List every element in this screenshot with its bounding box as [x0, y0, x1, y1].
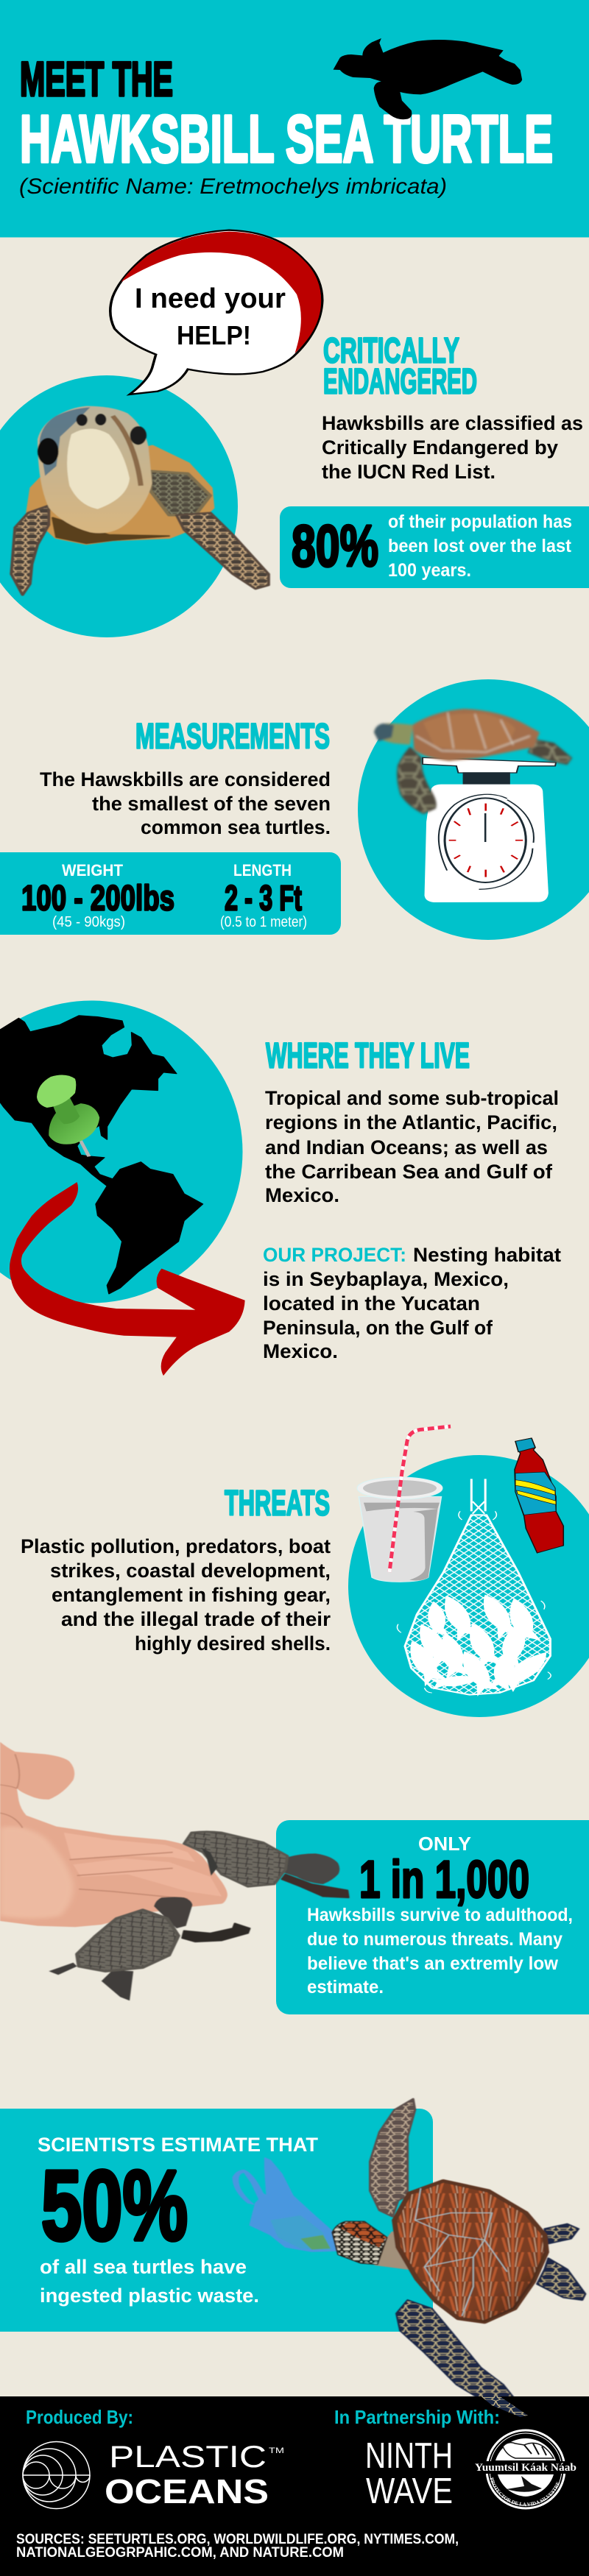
map: south america — [96, 1162, 203, 1294]
speech bubble — [110, 230, 322, 394]
photo: human hand — [0, 1742, 228, 1927]
heading: measurements: MEASUREMENTS — [135, 717, 330, 757]
logo: plastic oceans: PLASTIC — [109, 2439, 267, 2474]
callout: 1 in 1,000: 1 in 1,000 — [359, 1851, 529, 1909]
stat: 50 percent: 50% — [41, 2150, 188, 2261]
panel: threats — [21, 1426, 589, 1717]
icon: fishing net with fish — [397, 1479, 557, 1696]
icon: plastic bag — [233, 2158, 338, 2251]
photo: green turtle — [333, 2099, 585, 2417]
text: classification: Hawksbills are classified as — [322, 412, 583, 434]
turtle backdrop circle — [0, 375, 238, 637]
text: threats list: entanglement in fishing gear, — [52, 1584, 331, 1606]
scale backdrop circle — [358, 679, 589, 940]
text: ingested plastic: of all sea turtles have — [40, 2256, 247, 2278]
text: classification — [322, 412, 583, 483]
callout: 80 percent: been lost over the last — [388, 536, 572, 556]
text: threats list — [21, 1535, 331, 1655]
scientific name: (Scientific Name: Eretmochelys imbricata) — [19, 174, 447, 199]
bubble text — [135, 283, 286, 350]
text: smallest sea turtle — [40, 768, 331, 838]
text: sources — [16, 2532, 459, 2561]
text: habitat: regions in the Atlantic, Pacific, — [265, 1111, 557, 1133]
title: meet the: MEET THE — [20, 52, 173, 106]
photo: hatchling on fingers — [184, 1832, 348, 1897]
logo: plastic oceans: TM — [269, 2446, 284, 2455]
callout: 1 in 1,000: ONLY — [418, 1833, 471, 1855]
flipper tip over footer — [481, 2396, 528, 2417]
text: habitat: the Carribean Sea and Gulf of — [265, 1161, 553, 1183]
header banner — [0, 0, 589, 237]
heading: critically endangered: CRITICALLY — [323, 331, 459, 371]
text: scientists estimate: SCIENTISTS ESTIMATE THAT — [38, 2134, 318, 2156]
text: smallest sea turtle: The Hawskbills are considered — [40, 768, 331, 790]
heading: in partnership with: In Partnership With: — [334, 2406, 500, 2428]
callout: 1 in 1,000 — [276, 1820, 589, 2014]
map: north america — [0, 1016, 177, 1186]
callout: 1 in 1,000: believe that's an extremly low — [307, 1953, 559, 1974]
panel: critically endangered — [0, 230, 589, 637]
text: classification: Critically Endangered by — [322, 436, 558, 459]
text: our project: OUR PROJECT: — [263, 1244, 406, 1266]
panel: measurements — [0, 679, 589, 940]
text: our project: Nesting habitat — [413, 1244, 561, 1266]
text: habitat: Mexico. — [265, 1184, 339, 1206]
icon: plastic cup and straw — [357, 1426, 451, 1582]
text: sources: SOURCES: SEETURTLES.ORG, WORLDWILDLIFE.ORG, NYTIMES.COM, — [16, 2532, 459, 2547]
callout: 80 percent — [280, 506, 589, 588]
text: threats list: strikes, coastal development, — [50, 1560, 331, 1582]
panel: where they live — [0, 1001, 561, 1376]
footer — [0, 2396, 589, 2576]
text: ingested plastic — [40, 2256, 259, 2307]
text: our project — [263, 1244, 561, 1362]
bubble text: I need your — [135, 283, 286, 314]
logo: yuumtsil kaak naab: Yuumtsil Káak Náab — [475, 2462, 576, 2474]
callout: 80 percent: 100 years. — [388, 560, 471, 581]
photo: turtle on scale — [374, 709, 571, 813]
stats: weight and length: (0.5 to 1 meter) — [220, 914, 307, 930]
heading: critically endangered: ENDANGERED — [323, 362, 477, 402]
icon: kitchen scale — [423, 757, 556, 902]
text: smallest sea turtle: common sea turtles. — [141, 816, 331, 838]
photo: hawksbill front view — [11, 406, 269, 595]
logo: yuumtsil kaak naab: PROTECTOR DE LA VIDA SILVESTRE — [490, 2477, 560, 2507]
text: threats list: Plastic pollution, predators, boat — [21, 1535, 331, 1557]
logo: ninth wave — [365, 2436, 453, 2511]
text: classification: the IUCN Red List. — [322, 461, 495, 483]
text: our project: located in the Yucatan — [263, 1292, 480, 1314]
stats: weight and length: 100 - 200lbs — [21, 879, 174, 919]
icon: green pin — [37, 1075, 99, 1157]
icon: turtle silhouette — [334, 38, 522, 119]
stats: weight and length: 2 - 3 Ft — [225, 879, 302, 919]
text: ingested plastic: ingested plastic waste. — [40, 2285, 259, 2307]
text: our project: Mexico. — [263, 1340, 338, 1362]
text: habitat: and Indian Oceans; as well as — [265, 1136, 548, 1158]
stats: weight and length — [0, 852, 341, 935]
text: sources: NATIONALGEOGRPAHIC.COM, AND NATURE.COM — [16, 2545, 344, 2561]
text: threats list: and the illegal trade of their — [61, 1608, 331, 1630]
callout: 80 percent: of their population has — [388, 512, 572, 532]
text: threats list: highly desired shells. — [135, 1632, 331, 1655]
icon: soda bottle — [515, 1438, 563, 1553]
text: habitat: Tropical and some sub-tropical — [265, 1087, 559, 1109]
panel: plastic ingestion — [0, 2099, 585, 2417]
panel: hatchlings — [0, 1742, 589, 2014]
logo: plastic oceans — [23, 2439, 284, 2510]
heading: where they live: WHERE THEY LIVE — [266, 1036, 470, 1076]
arrow: red — [10, 1182, 245, 1376]
text: smallest sea turtle: the smallest of the seven — [92, 793, 331, 815]
heading: threats: THREATS — [225, 1484, 330, 1524]
heading: critically endangered — [323, 331, 477, 402]
text: habitat — [265, 1087, 559, 1206]
callout: 1 in 1,000: due to numerous threats. Many — [307, 1929, 562, 1950]
callout: 80 percent: 80% — [292, 513, 378, 578]
stats: weight and length: LENGTH — [233, 861, 292, 880]
threats backdrop circle — [348, 1455, 589, 1717]
logo: plastic oceans: OCEANS — [105, 2472, 269, 2510]
text: our project: is in Seybaplaya, Mexico, — [263, 1268, 509, 1290]
logo: ninth wave: NINTH — [365, 2436, 453, 2476]
bubble text: HELP! — [177, 320, 251, 350]
text: our project: Peninsula, on the Gulf of — [263, 1317, 493, 1339]
heading: produced by: Produced By: — [26, 2406, 133, 2428]
globe — [0, 1001, 243, 1303]
stats: weight and length: (45 - 90kgs) — [52, 914, 125, 930]
callout: 1 in 1,000: estimate. — [307, 1977, 384, 1998]
logo: ninth wave: WAVE — [366, 2471, 453, 2511]
callout: 1 in 1,000: Hawksbills survive to adulthood, — [307, 1905, 573, 1925]
logo: yuumtsil kaak naab — [475, 2429, 576, 2510]
photo: hatchling below hand — [49, 1897, 250, 2000]
stats: weight and length: WEIGHT — [62, 861, 124, 880]
